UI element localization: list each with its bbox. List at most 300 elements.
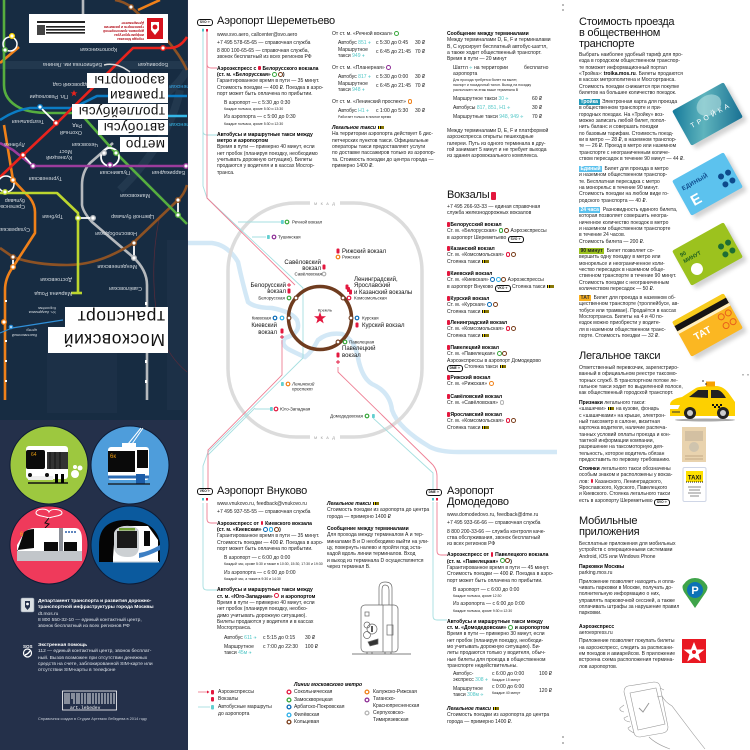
- station labels: [0, 46, 200, 338]
- Sheremetyevo galleries: Между терминалами D, E, F и платформой: [447, 128, 548, 134]
- Sheremetyevo galleries: аэроэкспресса открыты пешеходные: [447, 134, 534, 140]
- Vnukovo routes table: с 7:00 до 22:30: [263, 644, 298, 650]
- Domodedovo buses: Время в пути — примерно 30 минут, если: [447, 631, 545, 637]
- Domodedovo buses: ст. м. «Домодедовская» и аэропортом: [447, 625, 549, 631]
- station: Kievsky: Киевский вокзал: [450, 271, 492, 277]
- map station labels: Белорусская: [258, 296, 286, 300]
- fare: Troika: можно записать любой билет, попол-: [579, 118, 666, 124]
- legal taxi signs: с «шашечками» на крыше, электрон-: [579, 413, 666, 419]
- Sheremetyevo routes table: Автобус Н1 ✈: [338, 108, 369, 114]
- Sheremetyevo terminals: Время в пути — 20 минут: [447, 56, 507, 62]
- Domodedovo routes table: 100 ₽: [539, 671, 552, 677]
- Vnukovo legal taxi: [326, 501, 430, 520]
- Vnukovo airport heading: Аэропорт Внуково: [217, 485, 307, 497]
- Domodedovo airport heading: Аэропорт: [447, 485, 494, 497]
- mobile apps heading: приложения: [579, 526, 639, 538]
- station labels: Пл. Революции: [30, 93, 68, 99]
- Vnukovo buses: нет пробок (планируя поездку, необхо-: [217, 606, 307, 612]
- Vnukovo routes table: Маршрутное: [224, 644, 254, 650]
- icon: department: [21, 598, 34, 612]
- app: Aeroexpress: Аэроэкспресс: [579, 624, 614, 630]
- Vnukovo aeroexpress: (ст. м. «Киевская» ): [217, 527, 281, 533]
- map station labels: проспект: [292, 386, 313, 392]
- Vnukovo routes table: 30 ₽: [305, 635, 315, 641]
- Sheremetyevo airport heading: SVO ✈: [200, 20, 210, 24]
- Sheremetyevo buses: нет пробок (планируя поездку, необходимо: [217, 151, 318, 157]
- Sheremetyevo legal taxi: петчерских пунктов такси. Официальные: [332, 138, 429, 144]
- Sheremetyevo routes table: 70 ₽: [415, 49, 425, 55]
- fare: 24 hours: в течение 24 часов.: [579, 232, 625, 238]
- card: TAT: ТАТ: [692, 325, 713, 343]
- Vnukovo routes table: Автобус 611 ✈: [224, 635, 257, 641]
- Sheremetyevo aeroexpress: Стоимость поездки — 400 ₽. Поездка в аэро-: [217, 85, 323, 91]
- station: Savyolovsky: Савёловский вокзал: [450, 394, 502, 400]
- Vnukovo aeroexpress: Гарантированное время в пути — 35 минут.: [217, 533, 319, 539]
- station: Paveletsky: Стоянка такси: [464, 364, 498, 370]
- station: Leningradsky: [447, 320, 516, 339]
- department contacts: транспортной инфраструктуры города Москвы: [38, 605, 154, 610]
- illustration: taxi permit: [682, 427, 706, 462]
- Sheremetyevo legal taxi: та. Стоимость поездки до центра города —: [332, 157, 434, 163]
- Sheremetyevo phones free: звонок бесплатный из всех регионов РФ: [217, 54, 312, 60]
- station labels: Выставочный: [12, 333, 37, 338]
- icon: emergency SOS: SOS: [23, 644, 33, 649]
- vehicle circle: trolleybus: 6к: [110, 454, 116, 460]
- Vnukovo legal taxi: города — примерно 1400 ₽: [327, 514, 391, 520]
- fare: Troika: [579, 99, 685, 162]
- mobile apps intro: [579, 541, 676, 560]
- app: Aeroexpress: ем поездов и авиарейсов. В приложение: [579, 651, 675, 657]
- Sheremetyevo terminals: Между терминалами D, E, F и терминалами: [447, 37, 551, 43]
- mobile apps heading: [579, 516, 639, 538]
- Vnukovo terminals: и выход из терминала D осуществляется: [327, 558, 424, 564]
- circle metro line: [287, 286, 353, 350]
- legal taxi intro: Ответственный перевозчик, зарегистриро-: [579, 365, 679, 371]
- legend: metro lines column 2: Таганско-: [373, 696, 395, 702]
- Domodedovo buses: транспорте недействительны.: [447, 663, 518, 669]
- station labels: Марьина Роща: [34, 290, 72, 296]
- legend: metro lines column 1: [294, 689, 344, 726]
- department contacts: звонок бесплатный из всех регионов РФ: [38, 624, 130, 629]
- card: 90 minutes: МИНУТ: [682, 250, 702, 265]
- map station labels: Савёловский: [284, 259, 321, 266]
- fare: TAT: ля в наземном общественном транс-: [579, 327, 666, 333]
- app: Aeroexpress: Приложение позволяет покупать билеты: [579, 638, 674, 644]
- station: Leningradsky: Стоянка такси: [447, 333, 480, 339]
- Vnukovo contacts: www.vnukovo.ru, feedback@vnukovo.ru: [217, 500, 307, 506]
- barcode logo: art.lebedev: [70, 705, 101, 711]
- Domodedovo aeroexpress schedule: В аэропорт — с 6:00 до 0:00: [453, 587, 519, 593]
- Domodedovo buses: мо учитывать дорожную ситуацию). Би-: [447, 644, 540, 650]
- app: Aeroexpress: aeroexpress.ru: [579, 630, 613, 636]
- station: Yaroslavsky: Стоянка такси: [447, 425, 480, 431]
- fares heading: транспорте: [579, 38, 634, 50]
- Sheremetyevo legal taxi: Легальное такси: [332, 125, 376, 131]
- emergency help: Экстренная помощь: [38, 643, 87, 648]
- fare: 90 minutes: ственном транспорте в течение 90 минут.: [579, 273, 676, 279]
- fares intro: Выбрать наиболее удобный тариф для про-: [579, 52, 683, 58]
- Sheremetyevo terminal transport table: бесплатно: [524, 65, 548, 71]
- department contacts: [38, 599, 154, 629]
- Sheremetyevo terminal transport table: 70 ₽: [532, 114, 542, 120]
- station: Paveletsky: Ст. м. «Павелецкая»: [447, 352, 495, 358]
- legal taxi signs: танных условий оплаты проезда и кон-: [579, 432, 670, 438]
- app: Moscow parking: [579, 564, 679, 617]
- station: Belorussky: в аэропорт Шереметьево: [447, 235, 506, 241]
- vehicle circle: metro train: [91, 506, 169, 584]
- legal taxi ranks: и Киевского. Стоянка легального такси: [579, 491, 670, 497]
- legend lines: [198, 690, 214, 710]
- legend: metro lines title: Линии московского метро: [294, 682, 362, 688]
- legend: metro lines column 2: Серпуховско-: [373, 710, 405, 716]
- legal taxi signs: предоставить по первому требованию.: [579, 457, 670, 463]
- station: Kazansky: [447, 246, 516, 265]
- Sheremetyevo galleries: из здания аэровокзального комплекса.: [447, 153, 538, 159]
- Sheremetyevo aeroexpress: [217, 66, 324, 97]
- legal taxi ranks: [579, 466, 672, 506]
- station: Kievsky: в аэропорт Внуково Стоянка такси: [447, 284, 545, 290]
- app: Aeroexpress: встроена схема расположения термина-: [579, 657, 674, 663]
- app: Moscow parking: полнительную информацию о них,: [579, 591, 660, 597]
- fare: 24 hours: которая позволяет совершить неогра-: [579, 213, 668, 219]
- Sheremetyevo buses: учитывать дорожную ситуацию). Билеты: [217, 157, 312, 163]
- station: Yaroslavsky: Ярославский вокзал: [450, 412, 502, 418]
- cover subtitle list: аэропорты: [94, 73, 165, 88]
- Vnukovo routes table: [224, 634, 318, 656]
- Sheremetyevo routes table: Маршрутное: [338, 81, 368, 87]
- icon: parking app pin: [682, 578, 708, 608]
- legend: metro lines column 1: Филёвская: [294, 712, 319, 718]
- Domodedovo legal taxi: [446, 706, 550, 725]
- legend: metro lines column 1: Сокольническая: [294, 689, 332, 695]
- map station markers: [272, 220, 369, 418]
- Domodedovo contacts: www.domodedovo.ru, feedback@dme.ru: [447, 512, 538, 518]
- Sheremetyevo buses: Автобусы и маршрутные такси между: [217, 132, 313, 138]
- Sheremetyevo legal taxi: [332, 125, 436, 169]
- Sheremetyevo terminal transport table: расположен на этаж выше терминала B: [453, 88, 518, 92]
- map station labels: Савёловская: [295, 272, 323, 276]
- Domodedovo routes table: с 0:00 до 6:00: [492, 684, 524, 690]
- legal taxi signs: Признаки легального такси:: [579, 400, 646, 406]
- interchange nodes: [0, 37, 178, 267]
- fares intro: [579, 52, 683, 96]
- station: Rizhsky: [447, 375, 494, 388]
- station: Paveletsky: Аэроэкспрессы в аэропорт Домодедово: [447, 358, 541, 364]
- station: Kursky: Курский вокзал: [450, 296, 489, 302]
- Vnukovo aeroexpress: Стоимость поездки — 400 ₽. Поездка в аэро-: [217, 540, 323, 546]
- cover subtitle list: метро: [125, 137, 165, 152]
- legal taxi intro: [579, 365, 683, 397]
- station labels: Александровский сад: [52, 81, 107, 88]
- Domodedovo routes table: Каждые 15 минут: [492, 678, 520, 682]
- Vnukovo terminals: миналами В и D необходимо выйти на ули-: [327, 539, 429, 545]
- station: Leningradsky: Ленинградский вокзал: [450, 320, 507, 326]
- legend: metro lines column 2: Краснопресненская: [373, 703, 419, 709]
- legend: metro lines column 1: Кольцевая: [294, 719, 319, 725]
- Sheremetyevo buses: метро и аэропортом: [217, 138, 268, 144]
- header logo box: транспорта и развития: [104, 25, 144, 29]
- Domodedovo aeroexpress schedule: Из аэропорта — с 6:00 до 0:00: [453, 601, 525, 607]
- map station labels: Рижская: [342, 254, 360, 260]
- app: Moscow parking: чивать парковки в Москве, получать до-: [579, 585, 673, 591]
- Vnukovo phone: +7 495 937-55-55 — справочная служба: [217, 508, 310, 514]
- station: Belorussky: [447, 222, 547, 243]
- fare: Troika: городных поездах. На «Тройку» воз-: [579, 112, 664, 118]
- fare: 90 minutes: 90 минут Билет позволяет со-: [580, 248, 654, 254]
- station labels: Ул. Академика: [28, 310, 56, 315]
- map station labels: Речной вокзал: [292, 218, 323, 224]
- legend: routes: Автобусные маршруты: [218, 704, 272, 710]
- map station labels: [250, 218, 412, 418]
- Kremlin star: [314, 312, 326, 323]
- vehicle circle: tram: 6: [20, 532, 24, 538]
- vehicle circle: tram: [10, 506, 88, 584]
- app: Moscow parking: Приложение позволяет находить и опла-: [579, 579, 675, 585]
- Domodedovo legal taxi: Легальное такси: [447, 706, 491, 712]
- legal taxi signs: «шашечки» на кузове, фонарь: [579, 406, 659, 412]
- fare: 24 hours: [579, 207, 677, 245]
- map bus and train pictograms: [267, 220, 375, 418]
- terminal dots under airport pills: [202, 29, 438, 500]
- station: Rizhsky: Рижский вокзал: [450, 375, 490, 381]
- map station labels: и Казанский вокзалы: [354, 289, 412, 296]
- Domodedovo routes table: 120 ₽: [539, 688, 552, 694]
- Domodedovo aeroexpress: Гарантированное время в пути — 45 минут.: [447, 565, 549, 571]
- Sheremetyevo routes table: Автобус 851 ✈: [338, 40, 371, 46]
- map station labels: вокзал: [258, 330, 277, 336]
- mobile apps intro: Бесплатные приложения для мобильных: [579, 541, 676, 547]
- cover subtitle list: [72, 73, 168, 152]
- Sheremetyevo routes table: такси 949 ✈: [338, 53, 365, 59]
- Vnukovo legal taxi: Стоимость поездки из аэропорта до центра: [327, 507, 429, 513]
- fare: TAT: ТАТ Билет для проезда в наземном об-: [580, 295, 676, 301]
- legal taxi ranks: особым знаком и расположены у вокза-: [579, 472, 672, 478]
- Sheremetyevo terminal transport table: Маршрутное такси 30 ✈: [453, 96, 509, 102]
- station: Yaroslavsky: [447, 412, 516, 431]
- Sheremetyevo terminal transport table: Для прохода требуется билет на вылет,: [453, 78, 517, 82]
- fare: 24 hours: 24 часа Разновидность единого билета,: [580, 207, 677, 213]
- card: TAT: [672, 293, 742, 357]
- illustration: suitcase: [352, 582, 411, 654]
- Sheremetyevo routes table: с 6:45 до 21:45: [376, 49, 411, 55]
- Vnukovo aeroexpress schedule: В аэропорт — с 6:00 до 0:00: [224, 555, 290, 561]
- illustration: taxi: [670, 381, 735, 422]
- header logo box: инфраструктуры: [114, 33, 144, 37]
- Sheremetyevo aeroexpress: порт может быть оплачена по прибытии.: [217, 91, 313, 97]
- Domodedovo aeroexpress: Стоимость поездки — 400 ₽. Поездка в аэро-: [447, 571, 553, 577]
- station: Kursky: [447, 296, 498, 315]
- app: Moscow parking: Парковки Москвы: [579, 564, 624, 570]
- fare: Edinyi: родского транспорта — 40 ₽.: [579, 198, 647, 204]
- legend: metro lines column 2: Калужско-Рижская: [373, 689, 417, 695]
- Vnukovo buses: Мосгортранса.: [217, 625, 251, 631]
- fares heading: [579, 16, 674, 50]
- Sheremetyevo terminal transport table: Автобусы 817, 851, Н1 ✈: [453, 105, 510, 111]
- fare: TAT: порте. Стоимость поездки — 32 ₽.: [579, 333, 660, 339]
- MKAD ring road: М К А Д: [314, 202, 336, 206]
- fare: Edinyi: Стоимость поездки на любом виде го-: [579, 191, 669, 197]
- station labels: Пушкинская: [100, 169, 130, 175]
- Sheremetyevo routes table: Работает только в ночное время: [338, 115, 391, 119]
- station: Kazansky: Стоянка такси: [447, 259, 480, 265]
- Vnukovo aeroexpress schedule: Каждый час, а также в 9:30 и 14:30: [224, 577, 281, 581]
- department contacts: Департамент транспорта и развития дорожно-: [38, 599, 151, 604]
- Vnukovo terminals: цу, повернуть налево и пройти под эста-: [327, 545, 422, 551]
- legal taxi signs: тактной информации компании,: [579, 438, 654, 444]
- fare: Troika: транспорте с неограниченным количе-: [579, 150, 670, 156]
- station labels: Кузнецкий: [46, 154, 72, 161]
- fare: Edinyi: те. Бесплатная пересадка с метро: [579, 179, 660, 185]
- station: Kazansky: Казанский вокзал: [450, 246, 495, 252]
- header logo box: города Москвы: [117, 37, 144, 41]
- Vnukovo buses: Время в пути — примерно 40 минут, если: [217, 600, 315, 606]
- station labels: Менделеевская: [97, 263, 137, 269]
- station labels: Библиотека им. Ленина: [43, 61, 102, 67]
- fares heading: в общественном: [579, 26, 660, 38]
- station: Savyolovsky: [447, 394, 504, 407]
- Sheremetyevo routes table: 30 ₽: [415, 74, 425, 80]
- Domodedovo routes table: такси 308м ✈: [453, 692, 484, 698]
- Sheremetyevo routes table: с 6:45 до 21:45: [376, 83, 411, 89]
- station: Kazansky: Ст. м. «Комсомольская»: [447, 253, 504, 259]
- river: [188, 243, 557, 452]
- Domodedovo buses: нет пробок (планируя поездку, необходи-: [447, 638, 543, 644]
- app: Aeroexpress: лов аэропортов.: [579, 664, 617, 670]
- map station labels: Домодедовская: [330, 414, 364, 418]
- cover title: Московский транспорт: Московский: [63, 330, 165, 350]
- icon: aeroexpress app: [682, 639, 706, 663]
- Sheremetyevo buses: продаются у водителя и в кассах Мосгор-: [217, 163, 314, 169]
- Sheremetyevo terminal transport table: 30 ₽: [532, 105, 542, 111]
- Vnukovo terminals: кадой вдоль линии терминалов. Вход: [327, 551, 415, 557]
- station labels: Трубная: [42, 213, 63, 219]
- legal taxi ranks: SVO ✈: [657, 500, 667, 504]
- app: Aeroexpress: на аэроэкспресс, следить за расписани-: [579, 645, 674, 651]
- Domodedovo aeroexpress schedule: Каждые полчаса, кроме 12:30: [453, 594, 501, 598]
- fare: TAT: тобусе или трамвае). Продаётся в кассах: [579, 308, 676, 314]
- map station labels: Ленинский: [291, 380, 315, 386]
- station labels: бульвар: [5, 197, 25, 203]
- card: Troika: ТРОЙКА: [689, 102, 733, 130]
- Vnukovo aeroexpress schedule: [224, 555, 323, 581]
- Vnukovo buses: димо учитывать дорожную ситуацию).: [217, 613, 307, 619]
- map station labels: Киевская: [252, 316, 272, 320]
- station: Paveletsky: Павелецкий вокзал: [450, 345, 499, 351]
- station labels: Королёва: [37, 306, 56, 311]
- map station labels: Тушинская: [278, 234, 301, 240]
- fare: 90 minutes: [579, 248, 676, 292]
- MKAD ring road: [228, 199, 422, 441]
- map station labels: Комсомольская: [354, 296, 387, 300]
- Sheremetyevo galleries: [447, 128, 548, 159]
- Domodedovo buses: [447, 618, 549, 669]
- legend: routes: [218, 689, 272, 718]
- Sheremetyevo airport heading: Аэропорт Шереметьево: [217, 15, 335, 27]
- Sheremetyevo phones: +7 495 578-65-65 — справочная служба: [217, 40, 310, 46]
- illustration: hand with phone: [620, 682, 705, 749]
- fare: Troika: по базовым тарифам. Стоимость поезд-: [579, 131, 673, 137]
- station: Yaroslavsky: Ст. м. «Комсомольская»: [447, 419, 504, 425]
- Sheremetyevo routes table: такси 948 ✈: [338, 87, 365, 93]
- Sheremetyevo routes table: с 1:00 до 5:30: [376, 108, 408, 114]
- card: 90 minutes: [672, 222, 742, 286]
- card: Edinyi: ЕДИНЫЙ: [681, 173, 709, 192]
- fare: 90 minutes: монорельсе и неограниченное коли-: [579, 261, 665, 267]
- cover subtitle list: автобусы: [103, 120, 165, 135]
- station: Kievsky: VKO ✈: [497, 286, 508, 290]
- legend: metro lines column 2: [373, 689, 419, 724]
- Sheremetyevo terminal transport table: [453, 64, 548, 120]
- Domodedovo free line: [447, 528, 545, 547]
- Domodedovo routes table: с 6:00 до 0:00: [492, 671, 524, 677]
- Domodedovo legal taxi: города — примерно 1400 ₽.: [447, 719, 512, 725]
- station: Paveletsky: [447, 345, 541, 372]
- station: Kursky: Ст. м. «Курская»: [447, 303, 486, 309]
- fare: Edinyi: Единый Билет для проезда в метро: [580, 166, 669, 172]
- Vnukovo terminals: через терминал В.: [327, 564, 371, 570]
- fares intro: езда в городском общественном транспор-: [579, 58, 680, 64]
- app: Aeroexpress: [579, 624, 675, 670]
- mobile apps heading: Мобильные: [579, 514, 637, 526]
- Sheremetyevo buses: Время в пути — примерно 40 минут, если: [217, 144, 315, 150]
- Vnukovo terminals: Сообщение между терминалами: [327, 526, 409, 532]
- vehicle circle: bus: 64: [31, 452, 37, 458]
- fare: Troika: ки в метро — 28 ₽, в наземном транспор-: [579, 137, 676, 143]
- fare: Troika: нить баланс и совершать поездки: [579, 124, 658, 130]
- metro lines: [0, 0, 187, 400]
- Vnukovo buses: Автобусы и маршрутные такси между: [217, 587, 313, 593]
- map station labels: вокзал: [302, 266, 321, 272]
- Sheremetyevo terminals: [447, 30, 551, 62]
- legend: routes: до аэропорта: [218, 711, 249, 717]
- credit line: Справочник создан в Студии Артемия Лебедева в 2014 году: [38, 716, 147, 721]
- fare: Edinyi: [579, 166, 669, 204]
- Sheremetyevo terminals: B, C курсирует бесплатный автобус-шаттл,: [447, 44, 548, 50]
- fares intro: Стоимость поездки снижается при покупке: [579, 84, 679, 90]
- card: Edinyi: Е: [687, 190, 704, 210]
- Vnukovo aeroexpress: [217, 520, 324, 552]
- station labels: Кропоткинская: [80, 46, 117, 52]
- Domodedovo phone: +7 495 933-66-66 — справочная служба: [447, 520, 540, 526]
- illustration: taxi rank sign: TAXI: [688, 476, 701, 482]
- Domodedovo aeroexpress: (ст. м. «Павелецкая» ): [447, 559, 512, 565]
- map station labels: Юго-Западная: [280, 406, 311, 412]
- legend: metro lines column 1: Арбатско-Покровская: [294, 704, 344, 710]
- MKAD ring road: М К А Д: [314, 436, 336, 440]
- card: Troika: [672, 82, 742, 146]
- fold marks: [562, 4, 749, 744]
- legal taxi intro: ванный в официальном реестре таксомо-: [579, 371, 677, 377]
- legal taxi signs: разрешение на таксомоторную дея-: [579, 444, 664, 450]
- station labels: Новослободская: [95, 230, 137, 236]
- Sheremetyevo legal taxi: примерно 1400 ₽.: [332, 163, 374, 169]
- Sheremetyevo galleries: гой занимает 5 минут и не требует выхода: [447, 147, 547, 153]
- station labels: Маяковская: [120, 192, 150, 198]
- Domodedovo airport heading: [426, 485, 509, 508]
- fare: 24 hours: ниченное количество поездок в метро: [579, 220, 668, 226]
- fare: 24 hours: и наземном общественном транспорте: [579, 226, 670, 232]
- Vnukovo terminals: [327, 526, 429, 570]
- Domodedovo free line: ства обслуживания, звонок бесплатный: [447, 535, 540, 541]
- station labels: Чеховская: [72, 141, 98, 147]
- Vnukovo aeroexpress: порт может быть оплачена по прибытии.: [217, 546, 313, 552]
- fare: TAT: Мосгортранса. Билеты на 4 и 40 по-: [579, 314, 663, 320]
- Vnukovo routes table: с 5:15 до 0:15: [263, 635, 295, 641]
- fare: TAT: [579, 295, 679, 339]
- map station labels: Павелецкая: [349, 340, 375, 344]
- stations heading: Вокзалы: [447, 189, 489, 201]
- Sheremetyevo routes table: Маршрутное: [338, 47, 368, 53]
